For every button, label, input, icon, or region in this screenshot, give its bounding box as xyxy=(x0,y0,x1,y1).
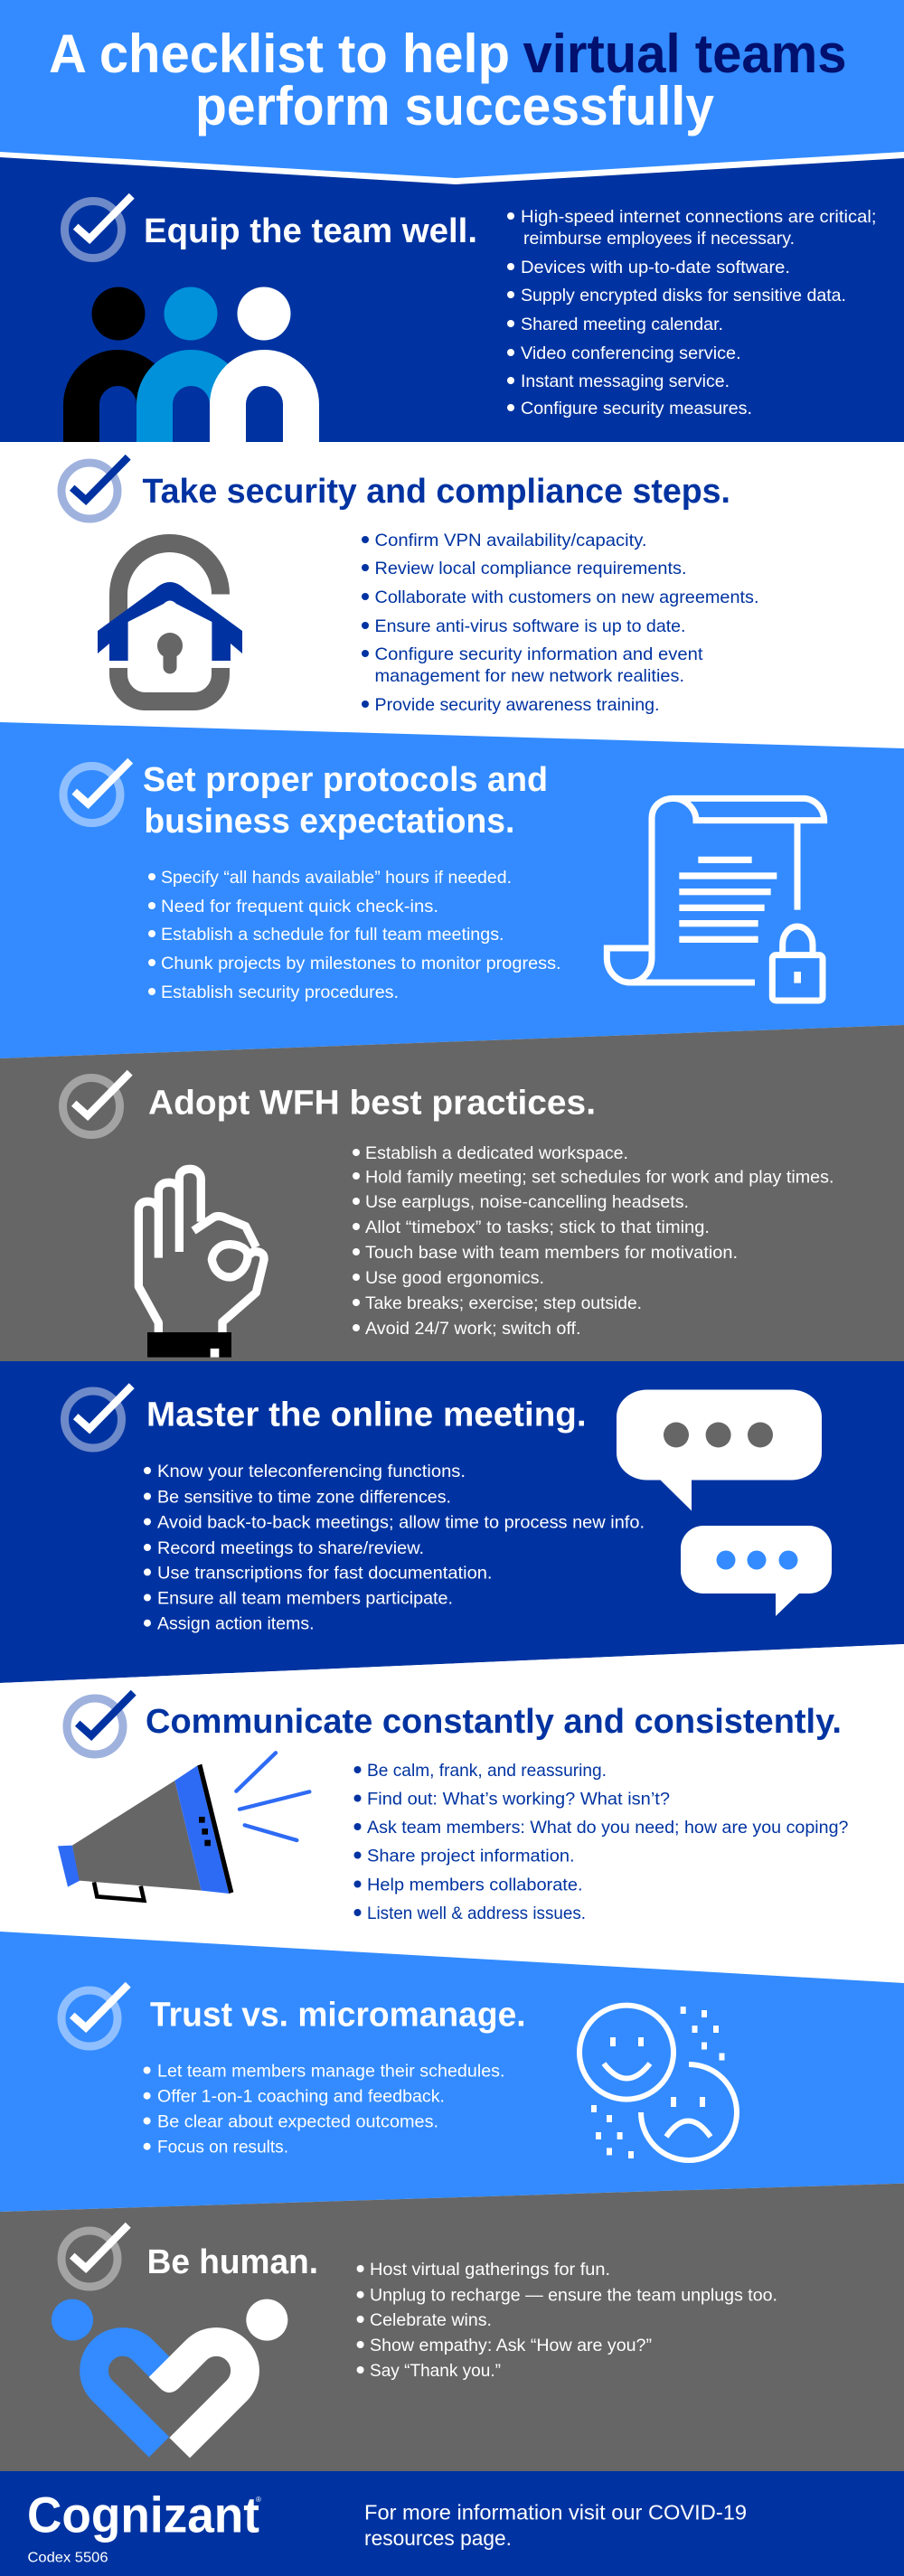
bullet list: equip: Devices with up-to-date software. xyxy=(521,258,790,277)
bullet list: equip: Video conferencing service. xyxy=(521,343,741,363)
icon: smiling and frowning faces xyxy=(579,2006,737,2160)
icon: checkmark xyxy=(63,761,130,823)
text: more information: resources page. xyxy=(364,2526,512,2550)
bullet list: communicate: Listen well & address issues. xyxy=(367,1904,586,1923)
bullet list: be human: Say “Thank you.” xyxy=(370,2361,501,2381)
heading: be human: Be human. xyxy=(147,2243,318,2281)
bullet list: WFH: Allot “timebox” to tasks; stick to that timing. xyxy=(365,1217,710,1237)
bullet list: be human: Host virtual gatherings for fun. xyxy=(370,2260,610,2280)
bullet list: protocols xyxy=(148,868,561,1002)
icon: heart of two people xyxy=(52,2299,287,2458)
bullet list: trust: Focus on results. xyxy=(157,2138,288,2158)
panel: be human xyxy=(0,2184,904,2471)
bullet list: protocols: Specify “all hands available” hours if needed. xyxy=(161,868,512,888)
panel: WFH best practices xyxy=(0,1025,904,1361)
icon: checkmark xyxy=(63,1073,130,1135)
panel: footer xyxy=(0,2471,904,2576)
title: A checklist to help xyxy=(49,24,510,84)
bullet list: trust: Let team members manage their schedules. xyxy=(157,2061,504,2081)
title: perform successfully xyxy=(195,76,715,136)
icon: megaphone xyxy=(58,1753,309,1901)
bullet list: online meeting: Avoid back-to-back meetings; allow time to process new info. xyxy=(157,1513,645,1533)
heading: trust vs micromanage: Trust vs. micromanage. xyxy=(150,1996,526,2034)
bullet list: equip: reimburse employees if necessary. xyxy=(523,229,795,249)
heading: protocols and expectations: Set proper protocols and xyxy=(143,761,548,799)
bullet list: protocols: Chunk projects by milestones to monitor progress. xyxy=(161,954,561,973)
heading: security and compliance: Take security and compliance steps. xyxy=(143,473,730,511)
bullet list: equip: Configure security measures. xyxy=(521,399,752,418)
heading: equip the team well: Equip the team well. xyxy=(144,212,477,250)
bullet list: security: management for new network realities. xyxy=(374,666,684,686)
bullet list: WFH: Establish a dedicated workspace. xyxy=(365,1143,628,1163)
bullet list: be human: Celebrate wins. xyxy=(370,2310,492,2330)
bullet list: online meeting: Assign action items. xyxy=(157,1614,315,1634)
heading: protocols and expectations xyxy=(143,761,548,841)
icon: checkmark xyxy=(61,2225,128,2287)
bullet list: protocols: Need for frequent quick check-ins. xyxy=(161,897,438,917)
bullet list: security: Ensure anti-virus software is up to date. xyxy=(374,616,685,636)
heading: communicate: Communicate constantly and consistently. xyxy=(146,1703,842,1741)
bullet list: be human: Show empathy: Ask “How are you?” xyxy=(370,2336,652,2355)
bullet list: trust: Be clear about expected outcomes. xyxy=(157,2111,438,2131)
bullet list: equip: Instant messaging service. xyxy=(521,371,730,391)
text: more information xyxy=(364,2501,747,2550)
bullet list: communicate xyxy=(354,1761,849,1923)
bullet list: communicate: Help members collaborate. xyxy=(367,1875,582,1894)
text: more information: For more information visit our COVID-19 xyxy=(364,2501,747,2524)
title xyxy=(49,24,846,136)
bullet list: equip: Supply encrypted disks for sensitive data. xyxy=(521,286,846,306)
bullet list: equip xyxy=(507,207,877,418)
panel: communicate xyxy=(0,1644,904,1983)
bullet list: trust: Offer 1-on-1 coaching and feedback. xyxy=(157,2087,445,2107)
icon: checkmark xyxy=(67,1693,134,1754)
bullet list: equip: High-speed internet connections are critical; xyxy=(521,207,877,227)
bullet list: online meeting: Record meetings to share/review. xyxy=(157,1538,424,1558)
title: virtual teams xyxy=(523,24,846,84)
icon: large speech bubble xyxy=(617,1390,822,1511)
bullet list: communicate: Share project information. xyxy=(367,1846,575,1866)
bullet list: online meeting: Know your teleconferencing functions. xyxy=(157,1462,466,1481)
bullet list: WFH: Touch base with team members for motivation. xyxy=(365,1243,738,1263)
bullet list: protocols: Establish security procedures. xyxy=(161,982,399,1002)
icon: checkmark xyxy=(61,457,128,519)
text: codex number: Codex 5506 xyxy=(27,2550,108,2565)
icon: scroll and padlock xyxy=(607,798,824,1001)
bullet list: online meeting: Ensure all team members participate. xyxy=(157,1589,453,1609)
bullet list: security: Collaborate with customers on new agreements. xyxy=(374,588,759,607)
bullet list: be human xyxy=(357,2260,777,2381)
panel: equip the team well xyxy=(0,157,904,442)
bullet list: WFH: Use earplugs, noise-cancelling headsets. xyxy=(365,1192,689,1212)
bullet list: WFH: Use good ergonomics. xyxy=(365,1268,544,1288)
bullet list: protocols: Establish a schedule for full team meetings. xyxy=(161,925,504,945)
icon: checkmark xyxy=(65,196,132,259)
heading: protocols and expectations: business expectations. xyxy=(144,803,514,841)
icon: house lock xyxy=(98,543,242,701)
bullet list: WFH: Take breaks; exercise; step outside. xyxy=(365,1293,642,1313)
bullet list: communicate: Find out: What’s working? What isn’t? xyxy=(367,1790,670,1810)
bullet list: WFH: Hold family meeting; set schedules for work and play times. xyxy=(365,1168,833,1188)
bullet list: communicate: Be calm, frank, and reassuring. xyxy=(367,1761,607,1781)
bullet list: equip: Shared meeting calendar. xyxy=(521,315,723,334)
bullet list: security: Configure security information and event xyxy=(374,644,703,664)
logo: Cognizant: ® xyxy=(256,2496,261,2504)
bullet list: online meeting xyxy=(144,1462,645,1634)
panel: trust vs micromanage xyxy=(0,1932,904,2212)
heading: WFH best practices: Adopt WFH best practices. xyxy=(148,1085,596,1123)
bullet list: security: Confirm VPN availability/capacity. xyxy=(374,531,647,550)
bullet list: communicate: Ask team members: What do you need; how are you coping? xyxy=(367,1818,849,1838)
panel: protocols and expectations xyxy=(0,722,904,1058)
bullet list: security: Review local compliance requirements. xyxy=(374,559,687,578)
panel: security and compliance xyxy=(0,442,904,731)
icon: three people xyxy=(81,287,301,442)
icon: checkmark xyxy=(61,1985,128,2046)
bullet list: be human: Unplug to recharge — ensure the team unplugs too. xyxy=(370,2286,777,2306)
bullet list: security: Provide security awareness training. xyxy=(374,695,660,715)
heading: online meeting: Master the online meeting. xyxy=(146,1396,587,1434)
bullet list: WFH: Avoid 24/7 work; switch off. xyxy=(365,1319,580,1339)
bullet list: online meeting: Be sensitive to time zone differences. xyxy=(157,1488,451,1508)
panel: header xyxy=(0,0,904,178)
bullet list: WFH xyxy=(353,1143,833,1339)
icon: OK hand xyxy=(138,1169,264,1358)
bullet list: online meeting: Use transcriptions for fast documentation. xyxy=(157,1563,492,1583)
icon: small speech bubble xyxy=(681,1526,832,1616)
icon: checkmark xyxy=(65,1386,132,1448)
bullet list: trust xyxy=(144,2061,504,2158)
bullet list: security xyxy=(362,531,759,715)
logo: Cognizant: Cognizant xyxy=(27,2487,259,2543)
panel: online meeting xyxy=(0,1361,904,1683)
